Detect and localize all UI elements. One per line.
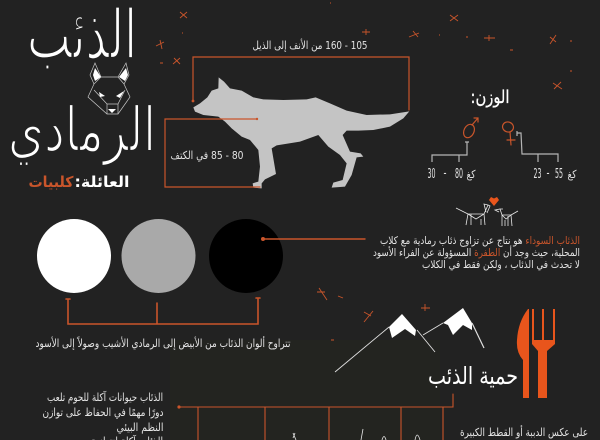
male weight bracket: [432, 142, 469, 162]
stars: [156, 3, 572, 340]
black wolves note: المحلية، حيث وجد أن الطفرة المسؤولة عن الفراء الأسود: [373, 245, 580, 259]
family label: كلبيات: [28, 173, 74, 191]
female weight bracket: [517, 131, 558, 162]
icon: male symbol: [462, 118, 478, 139]
icon: female symbol: [501, 120, 515, 145]
male weight label: 30: [428, 167, 436, 182]
diet text: دورًا مهمًا في الحفاظ على توازن: [42, 406, 164, 419]
prey sketches: [293, 429, 420, 440]
male weight label: -: [444, 166, 447, 181]
family label: العائلة:: [74, 173, 130, 191]
diet branching lines: [177, 394, 453, 440]
colour swatches: [37, 219, 283, 293]
shoulder label: 80 - 85 في الكتف: [170, 149, 244, 162]
weight heading: الوزن:: [470, 87, 510, 108]
icon: two wolves and heart: [456, 197, 518, 226]
callout line from black swatch: [261, 237, 365, 241]
title: grey: الرمادي: [8, 93, 156, 166]
shoulder bracket: [165, 118, 260, 187]
diet text: الذئاب حيوانات آكلة للحوم تلعب: [47, 390, 163, 404]
mountains: [335, 308, 484, 372]
wolf silhouette: [193, 77, 409, 188]
diet heading: حمية الذئب: [428, 362, 518, 390]
male weight label: كغ: [466, 168, 476, 181]
female weight label: -: [546, 166, 550, 181]
diet text: النظم البيئي: [116, 421, 164, 434]
female weight label: 55: [555, 167, 563, 182]
male weight label: [428, 166, 476, 182]
length label: 105 - 160 من الأنف إلى الذيل: [252, 38, 368, 52]
swatch bracket: [66, 298, 260, 324]
female weight label: كغ: [568, 168, 577, 181]
colour caption: تتراوح ألوان الذئاب من الأبيض إلى الرمادي الأشيب وصولاً إلى الأسود: [36, 335, 290, 350]
male weight label: 80: [455, 167, 463, 182]
length bracket: [192, 57, 409, 110]
diet text: [42, 390, 164, 440]
family label: [28, 173, 130, 191]
black wolves note: [373, 235, 580, 271]
female weight label: 23: [534, 167, 542, 182]
icon: knife and fork: [517, 309, 555, 398]
female weight label: [534, 166, 577, 182]
icon: wolf head: [88, 63, 130, 114]
black wolves note: الذئاب السوداء هو نتاج عن تزاوج ذئاب رمادية مع كلاب: [380, 235, 580, 247]
